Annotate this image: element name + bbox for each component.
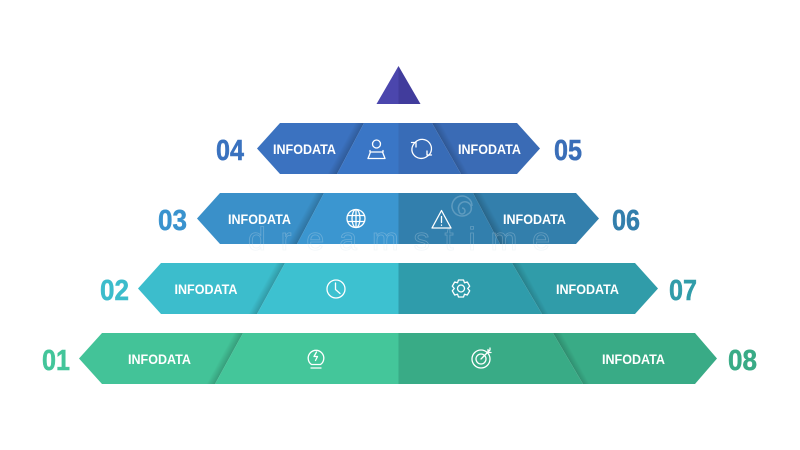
panel 05 bbox=[432, 123, 540, 174]
tier 4-5: top blue band bbox=[216, 123, 582, 174]
label 01: INFODATA bbox=[128, 352, 191, 367]
number 07: 07 bbox=[669, 275, 697, 307]
number 01: 01 bbox=[42, 345, 70, 377]
panel 08 bbox=[553, 333, 717, 384]
center panel right bbox=[398, 123, 461, 174]
number 06: 06 bbox=[612, 205, 640, 237]
seam shadows bbox=[205, 333, 593, 384]
center panel left bbox=[257, 263, 398, 314]
tier 2-7: teal band bbox=[100, 263, 697, 314]
icon: clock bbox=[327, 280, 345, 298]
tier 1-8: green band bbox=[42, 333, 757, 384]
center panel left bbox=[337, 123, 398, 174]
number 05: 05 bbox=[554, 135, 582, 167]
panel 06 bbox=[473, 193, 599, 244]
icon: warning triangle bbox=[432, 210, 451, 228]
panel 02 bbox=[138, 263, 285, 314]
label 03: INFODATA bbox=[228, 212, 291, 227]
seam shadows bbox=[287, 193, 510, 244]
tier 3-6: blue band bbox=[158, 193, 640, 244]
panel 01 bbox=[79, 333, 243, 384]
label 05: INFODATA bbox=[458, 142, 521, 157]
icon: person on map bbox=[368, 140, 385, 158]
center panel left bbox=[297, 193, 398, 244]
watermark: dreamstime bbox=[248, 221, 552, 257]
watermark bbox=[248, 196, 552, 257]
number 03: 03 bbox=[158, 205, 187, 237]
number 04: 04 bbox=[216, 135, 244, 167]
label 02: INFODATA bbox=[174, 282, 238, 297]
panel 03 bbox=[197, 193, 324, 244]
icon: globe bbox=[347, 210, 365, 228]
label 06: INFODATA bbox=[503, 212, 566, 227]
icon: refresh arrows bbox=[412, 139, 432, 158]
seam shadows bbox=[247, 263, 552, 314]
panel 04 bbox=[257, 123, 364, 174]
icon: gear bbox=[452, 280, 470, 297]
label 07: INFODATA bbox=[556, 282, 619, 297]
seam shadows bbox=[327, 123, 471, 174]
icon: target bbox=[472, 348, 491, 368]
number 08: 08 bbox=[728, 345, 757, 377]
panel 07 bbox=[512, 263, 658, 314]
label 08: INFODATA bbox=[602, 352, 665, 367]
center panel right bbox=[398, 333, 583, 384]
center panel right bbox=[398, 193, 500, 244]
number 02: 02 bbox=[100, 275, 129, 307]
apex triangle bbox=[376, 66, 420, 104]
icon: energy bulb bbox=[308, 350, 324, 368]
label 04: INFODATA bbox=[273, 142, 336, 157]
center panel left bbox=[215, 333, 398, 384]
center panel right bbox=[398, 263, 542, 314]
